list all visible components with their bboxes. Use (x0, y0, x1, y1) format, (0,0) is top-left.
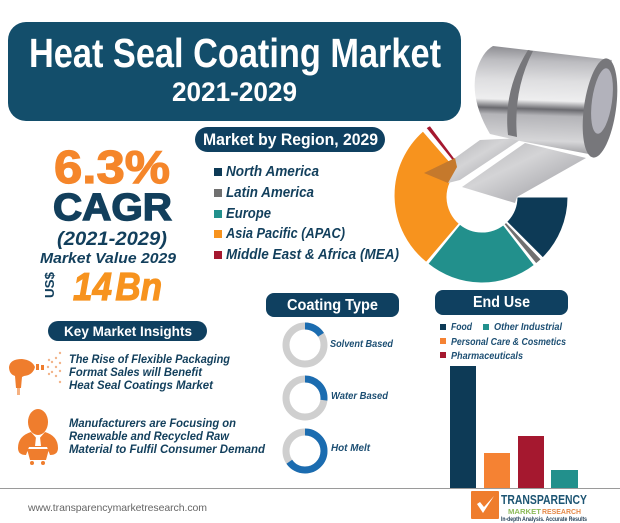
ring: solvent based (286, 326, 394, 364)
logo: Transparency Market Research: In-depth Analysis. Accurate Results (501, 517, 588, 523)
title banner (8, 22, 461, 121)
insight text 1: Format Sales will Benefit (69, 367, 203, 379)
region legend: North America (226, 164, 319, 180)
end use legend: Food (451, 322, 473, 333)
title: Heat Seal Coating Market (29, 30, 441, 76)
region legend: Latin America (226, 185, 314, 201)
key insights heading pill: Key Market Insights (64, 323, 192, 339)
logo: Transparency Market Research (471, 491, 588, 523)
market value label: Market Value 2029 (40, 251, 176, 267)
ring: water based (286, 379, 389, 417)
end use heading pill (435, 290, 568, 315)
CAGR value: 6.3% (54, 141, 170, 193)
CAGR label: CAGR (53, 187, 172, 229)
end use heading pill: End Use (473, 294, 530, 311)
currency: US$ (42, 271, 57, 298)
ring: solvent based: Solvent Based (330, 338, 394, 350)
end use legend: Personal Care & Cosmetics (451, 337, 566, 348)
insight text 2: Renewable and Recycled Raw (69, 431, 230, 443)
bar chart: end use (450, 366, 578, 488)
logo: Transparency Market Research: MARKET (508, 507, 541, 516)
insight text 1: The Rise of Flexible Packaging (69, 354, 230, 366)
ring: hot melt (286, 432, 370, 470)
website url: www.transparencymarketresearch.com (27, 502, 207, 514)
region heading pill: Market by Region, 2029 (203, 130, 378, 149)
logo: Transparency Market Research: RESEARCH (542, 507, 581, 516)
icon: manufacturer with cart (18, 409, 58, 465)
coating type heading pill (266, 293, 399, 317)
end use legend: Other Industrial (494, 322, 562, 333)
insight text 1: Heat Seal Coatings Market (69, 380, 214, 392)
coating type heading pill: Coating Type (287, 297, 378, 314)
donut chart: market by region (394, 126, 568, 283)
end use legend: Pharmaceuticals (451, 351, 523, 362)
logo: Transparency Market Research: TRANSPARENCY (501, 492, 587, 507)
foil tape roll image (424, 46, 620, 203)
region legend (214, 164, 399, 263)
CAGR period: (2021-2029) (57, 229, 167, 250)
subtitle years: 2021-2029 (172, 77, 297, 107)
region legend: Europe (226, 206, 271, 222)
key insights heading pill (48, 321, 207, 341)
ring: water based: Water Based (331, 390, 389, 402)
CAGR and market value stats (40, 141, 176, 309)
insight text 2: Manufacturers are Focusing on (69, 418, 236, 430)
end use legend (440, 322, 566, 362)
icon: spray gun (9, 352, 61, 395)
insight text 2: Material to Fulfil Consumer Demand (69, 444, 266, 456)
region legend: Asia Pacific (APAC) (225, 226, 345, 242)
region legend: Middle East & Africa (MEA) (226, 247, 399, 263)
ring: hot melt: Hot Melt (331, 442, 370, 454)
market value: 14 Bn (73, 266, 162, 309)
